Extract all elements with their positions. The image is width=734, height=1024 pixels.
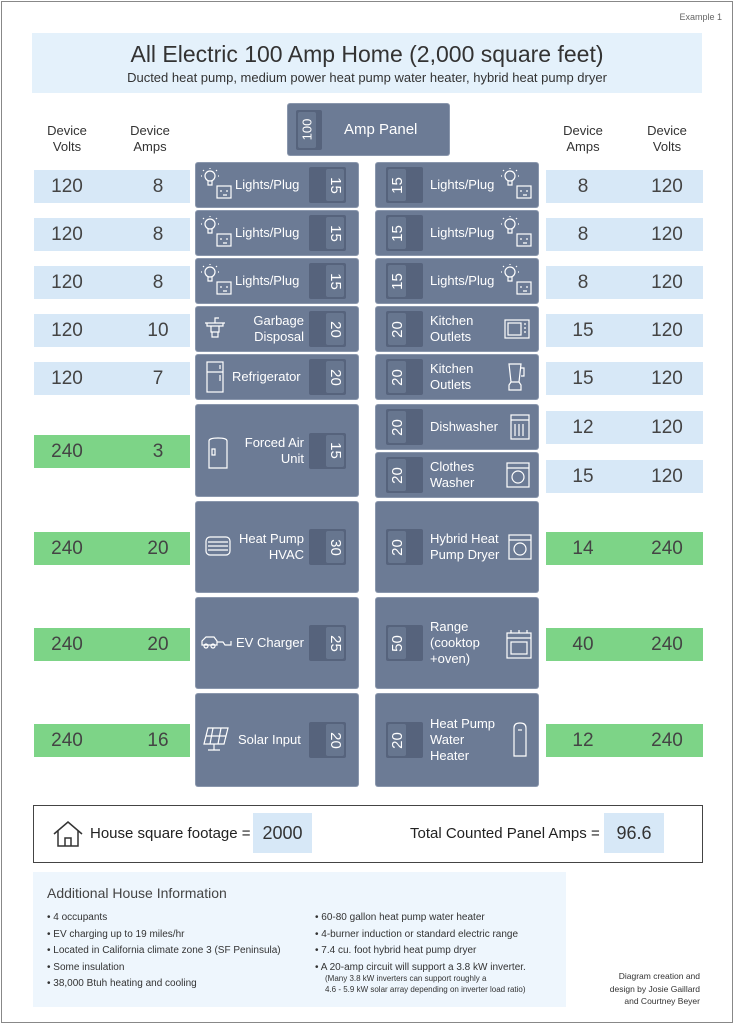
left values: 120 <box>51 176 83 196</box>
breaker: range: +oven) <box>430 651 470 666</box>
breaker: lights R1 <box>376 163 538 207</box>
text: 20 <box>147 634 169 654</box>
text: 240 <box>651 730 683 750</box>
additional info: • 4 occupants <box>47 912 107 923</box>
breaker: dishwasher: Dishwasher <box>430 419 498 434</box>
additional info: • 4-burner induction or standard electric range <box>315 928 518 940</box>
title block <box>32 33 702 93</box>
breaker: lights L2 <box>196 211 358 255</box>
breaker: hybrid heat pump dryer: Pump Dryer <box>430 547 499 562</box>
breaker: heat pump water heater: 20 <box>388 732 406 748</box>
text: 8 <box>578 272 588 292</box>
text: 14 <box>572 538 594 558</box>
breaker: heat pump water heater <box>376 694 538 786</box>
breaker: lights R3: Lights/Plug <box>430 273 494 288</box>
text: 120 <box>651 368 683 388</box>
house square footage: House square footage = <box>90 825 251 842</box>
breaker: lights R1: Lights/Plug <box>430 177 494 192</box>
headers left <box>47 123 87 154</box>
text: 120 <box>651 416 683 438</box>
text: 120 <box>651 320 683 340</box>
text: 120 <box>51 272 83 292</box>
breaker: lights L3: Lights/Plug <box>235 273 299 288</box>
breaker: dishwasher: 20 <box>388 419 406 435</box>
breaker: kitchen outlets microwave: Outlets <box>430 329 471 344</box>
breaker: range: Range <box>430 619 468 634</box>
breaker: lights L2: 15 <box>326 225 344 241</box>
additional info: • 38,000 Btuh heating and cooling <box>47 978 197 989</box>
text: 120 <box>651 272 683 292</box>
amp panel: 100 <box>300 119 315 140</box>
breaker: refrigerator: 20 <box>326 369 344 385</box>
total panel amps: Total Counted Panel Amps = <box>410 825 600 842</box>
breaker: lights L3 <box>196 259 358 303</box>
title block: Ducted heat pump, medium power heat pump water heater, hybrid heat pump dryer <box>127 70 607 85</box>
text: 12 <box>572 416 594 438</box>
breaker: hybrid heat pump dryer: 20 <box>388 539 406 555</box>
breaker: clothes washer <box>376 453 538 497</box>
breaker: EV charger: EV Charger <box>236 635 304 650</box>
breaker: kitchen outlets blender: Kitchen <box>430 361 473 376</box>
breaker: range <box>376 598 538 688</box>
breaker: kitchen outlets blender <box>376 355 538 399</box>
breaker: garbage disposal: Disposal <box>254 329 304 344</box>
breaker: refrigerator <box>196 355 358 399</box>
breaker: kitchen outlets microwave: Kitchen <box>430 313 473 328</box>
breaker: EV charger: 25 <box>326 635 344 651</box>
text: 16 <box>147 730 169 750</box>
headers left: Device <box>47 123 87 138</box>
credits: and Courtney Beyer <box>624 996 700 1006</box>
text: 120 <box>51 320 83 340</box>
summary box <box>33 805 703 863</box>
summary box: 2000 <box>262 822 303 842</box>
headers right <box>563 123 603 154</box>
breaker: range: (cooktop <box>430 635 480 650</box>
text: 240 <box>51 538 83 558</box>
breaker: lights R3 <box>376 259 538 303</box>
right values: 8 <box>578 176 588 196</box>
text: 120 <box>651 466 683 486</box>
breaker: lights L1: 15 <box>326 177 344 193</box>
text: 8 <box>578 224 588 244</box>
additional info: 4.6 - 5.9 kW solar array depending on inverter load ratio) <box>325 985 526 994</box>
breaker: range: 50 <box>388 635 406 651</box>
text: 240 <box>651 634 683 654</box>
text: 40 <box>572 634 594 654</box>
credits: Diagram creation and <box>619 971 700 981</box>
headers left: Volts <box>53 139 81 154</box>
breaker: lights R3: 15 <box>388 273 406 289</box>
title block: All Electric 100 Amp Home (2,000 square feet) <box>130 41 604 67</box>
example label: Example 1 <box>679 12 722 22</box>
text: Device <box>130 123 170 138</box>
additional info: • 60-80 gallon heat pump water heater <box>315 912 485 923</box>
headers right: Amps <box>566 139 600 154</box>
breaker: refrigerator: Refrigerator <box>232 369 301 384</box>
additional info <box>33 872 566 1007</box>
summary box: 96.6 <box>616 822 652 842</box>
breaker: dishwasher <box>376 405 538 449</box>
right values: 120 <box>651 176 683 196</box>
breaker: hybrid heat pump dryer <box>376 502 538 592</box>
text: Amps <box>133 139 167 154</box>
additional info: (Many 3.8 kW inverters can support roughly a <box>325 974 486 983</box>
breaker: forced air unit <box>196 405 358 496</box>
amp panel <box>288 104 449 155</box>
text: 12 <box>572 730 594 750</box>
text: 20 <box>147 538 169 558</box>
credits <box>610 971 700 1006</box>
breaker: solar input: 20 <box>326 732 344 748</box>
breaker: clothes washer: Clothes <box>430 459 474 474</box>
text: 15 <box>572 368 594 388</box>
breaker: lights L1: Lights/Plug <box>235 177 299 192</box>
text: 7 <box>153 368 163 388</box>
additional info: • 7.4 cu. foot hybrid heat pump dryer <box>315 945 476 956</box>
text: 240 <box>51 634 83 654</box>
text: 120 <box>51 368 83 388</box>
text: 240 <box>51 440 83 462</box>
breaker: heat pump water heater: Water <box>430 732 464 747</box>
breaker: forced air unit: 15 <box>326 442 344 459</box>
breaker: clothes washer: 20 <box>388 467 406 483</box>
breaker: kitchen outlets blender: Outlets <box>430 377 471 392</box>
breaker: solar input <box>196 694 358 786</box>
breaker: kitchen outlets microwave <box>376 307 538 351</box>
text: 15 <box>572 466 594 486</box>
breaker: heat pump HVAC: Heat Pump <box>239 531 304 546</box>
text: 240 <box>51 730 83 750</box>
breaker: heat pump HVAC <box>196 502 358 592</box>
breaker: EV charger <box>196 598 358 688</box>
breaker: garbage disposal <box>196 307 358 351</box>
breaker: heat pump HVAC: HVAC <box>269 547 304 562</box>
breaker: lights R1: 15 <box>388 177 406 193</box>
left values <box>34 170 190 203</box>
breaker: forced air unit: Unit <box>281 450 304 466</box>
text: 15 <box>572 320 594 340</box>
breaker: clothes washer: Washer <box>430 475 474 490</box>
headers right: Device <box>563 123 603 138</box>
text: 120 <box>51 224 83 244</box>
icon: house <box>54 821 82 847</box>
breaker: lights R2: 15 <box>388 225 406 241</box>
breaker: garbage disposal: 20 <box>326 321 344 337</box>
left values: 8 <box>153 176 163 196</box>
text: 120 <box>651 224 683 244</box>
additional info: • Located in California climate zone 3 (SF Peninsula) <box>47 945 281 956</box>
additional info: • Some insulation <box>47 962 124 972</box>
breaker: garbage disposal: Garbage <box>253 313 304 328</box>
additional info: • EV charging up to 19 miles/hr <box>47 928 184 940</box>
breaker: forced air unit: Forced Air <box>245 434 304 450</box>
breaker: kitchen outlets microwave: 20 <box>388 321 406 337</box>
text: 10 <box>147 320 169 340</box>
breaker: heat pump HVAC: 30 <box>326 539 344 555</box>
text: 3 <box>153 440 163 462</box>
text: 8 <box>153 224 163 244</box>
breaker: heat pump water heater: Heater <box>430 748 469 763</box>
breaker: lights R2: Lights/Plug <box>430 225 494 240</box>
breaker: lights R2 <box>376 211 538 255</box>
breaker: lights L3: 15 <box>326 273 344 289</box>
breaker: hybrid heat pump dryer: Hybrid Heat <box>430 531 499 546</box>
amp panel: Amp Panel <box>344 120 417 138</box>
additional info: Additional House Information <box>47 885 227 901</box>
text: Device <box>647 123 687 138</box>
breaker: kitchen outlets blender: 20 <box>388 369 406 385</box>
breaker: heat pump water heater: Heat Pump <box>430 716 495 731</box>
right values <box>546 170 703 203</box>
text: Volts <box>653 139 681 154</box>
breaker: solar input: Solar Input <box>238 732 301 747</box>
text: 240 <box>651 538 683 558</box>
text: 8 <box>153 272 163 292</box>
breaker: lights L1 <box>196 163 358 207</box>
credits: design by Josie Gaillard <box>610 984 700 994</box>
breaker: lights L2: Lights/Plug <box>235 225 299 240</box>
additional info: • A 20-amp circuit will support a 3.8 kW inverter. <box>315 962 526 972</box>
